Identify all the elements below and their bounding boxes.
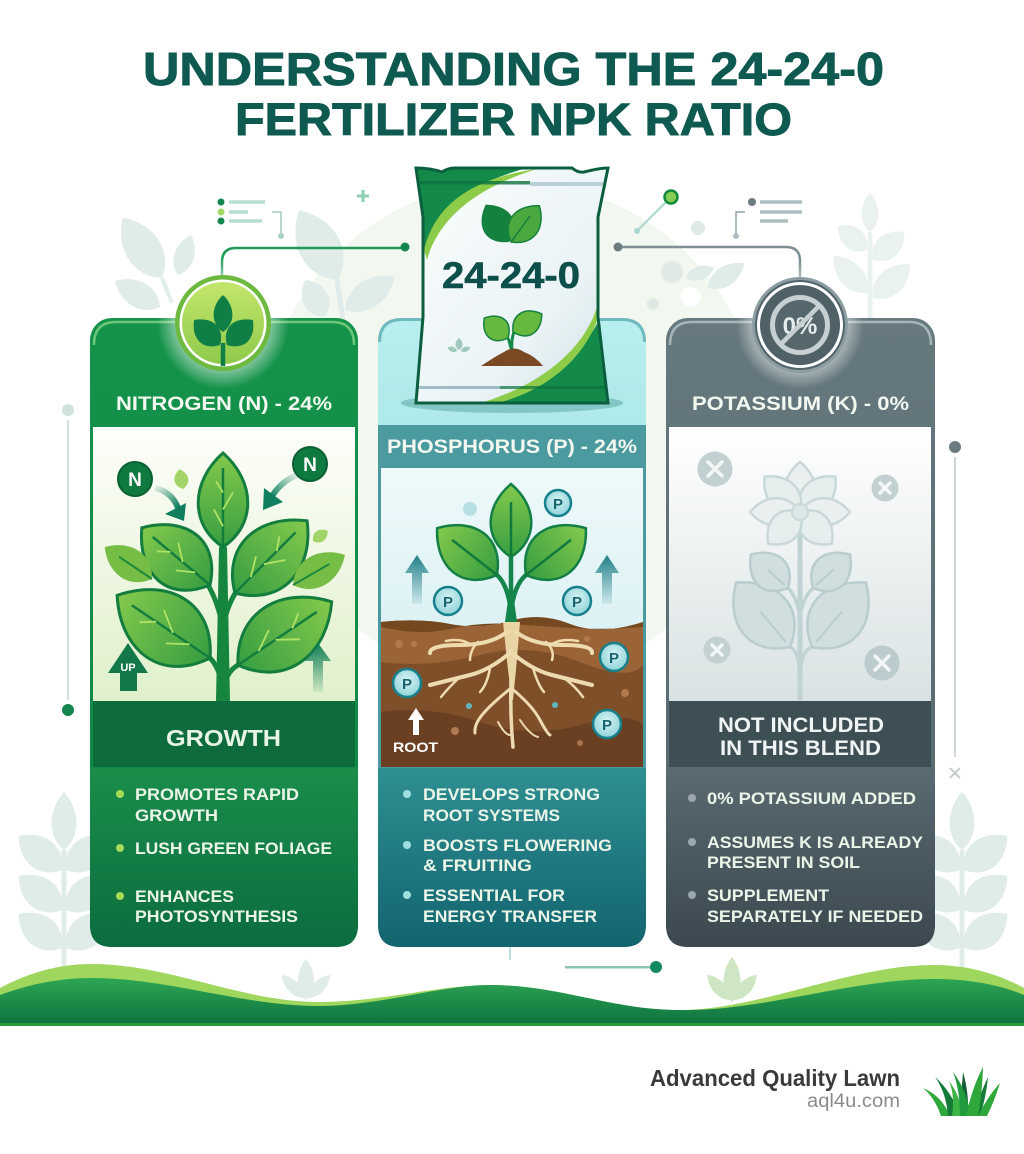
potassium notes: SEPARATELY IF NEEDED (707, 907, 923, 926)
left decoration lines (62, 190, 369, 716)
panel: nitrogen (90, 318, 358, 947)
icon: potassium badge: 0% (783, 313, 817, 340)
roots (430, 622, 592, 747)
panel: potassium (666, 318, 935, 947)
phosphorus illustration: P (572, 594, 582, 611)
faint hill plants (277, 957, 762, 1004)
growth up arrows: UP (120, 662, 136, 674)
rolling hills (0, 957, 1024, 1026)
potassium notes: SUPPLEMENT (707, 886, 830, 905)
nitrogen badges and arrows: N (303, 455, 317, 476)
phosphorus benefits (403, 785, 612, 926)
potassium notes: PRESENT IN SOIL (707, 853, 860, 872)
title: UNDERSTANDING THE 24-24-0 (143, 43, 884, 95)
potassium illustration (669, 427, 931, 701)
nitrogen illustration (93, 427, 355, 701)
x marks (698, 452, 900, 680)
nitrogen benefits: ENHANCES (135, 887, 234, 906)
nitrogen benefits: PHOTOSYNTHESIS (135, 907, 298, 926)
nitrogen heading: NITROGEN (N) - 24% (116, 394, 332, 415)
growth up arrows (108, 643, 331, 692)
potassium heading: POTASSIUM (K) - 0% (692, 394, 909, 415)
root label: ROOT (393, 739, 438, 755)
phosphorus illustration: P (602, 717, 612, 734)
title: FERTILIZER NPK RATIO (235, 94, 792, 145)
bag top leaves (472, 196, 551, 251)
phosphorus benefits: DEVELOPS STRONG (423, 785, 600, 804)
phosphorus benefits: ROOT SYSTEMS (423, 806, 560, 825)
bag ratio text: 24-24-0 (442, 255, 580, 296)
faint background plants (9, 193, 1017, 968)
growth arrows (405, 555, 619, 604)
title (143, 43, 884, 145)
not included band: IN THIS BLEND (720, 737, 881, 760)
nitrogen benefits: GROWTH (135, 806, 218, 825)
phosphorus benefits: & FRUITING (423, 856, 532, 875)
phosphorus benefits: ESSENTIAL FOR (423, 886, 565, 905)
phosphorus badges (393, 490, 628, 738)
potassium notes: ASSUMES K IS ALREADY (707, 833, 924, 852)
bag body (418, 170, 606, 402)
nitrogen benefits: PROMOTES RAPID (135, 785, 299, 804)
nitrogen badges and arrows (118, 447, 327, 521)
bag shadow (401, 393, 623, 413)
phosphorus illustration: P (402, 676, 412, 693)
right decoration lines (510, 190, 961, 973)
connector: nitrogen (222, 248, 405, 280)
root label (393, 708, 438, 755)
nitrogen benefits: LUSH GREEN FOLIAGE (135, 839, 332, 858)
phosphorus heading: PHOSPHORUS (P) - 24% (387, 437, 637, 458)
growth band (93, 701, 355, 767)
brand footer: Advanced Quality Lawn (650, 1065, 900, 1091)
phosphorus illustration (381, 468, 643, 767)
nitrogen badges and arrows: N (128, 470, 142, 491)
phosphorus benefits: ENERGY TRANSFER (423, 907, 597, 926)
growth band: GROWTH (166, 725, 281, 751)
potassium notes: 0% POTASSIUM ADDED (707, 789, 916, 808)
icon: nitrogen badge (157, 257, 289, 389)
faded flower (715, 462, 887, 700)
not included band (669, 701, 931, 767)
phosphorus illustration: P (443, 594, 453, 611)
connector dots (400, 242, 622, 252)
bag seedling (447, 304, 548, 366)
icon: grass (923, 1067, 1000, 1116)
brand footer: aql4u.com (807, 1091, 900, 1112)
connector: potassium (618, 247, 800, 280)
plant stem (208, 585, 238, 690)
fertilizer bag (401, 165, 623, 413)
potassium notes (688, 789, 924, 926)
plant leaves (96, 453, 353, 692)
brand footer (650, 1065, 1000, 1116)
panel: phosphorus (378, 318, 646, 947)
seedling (422, 484, 601, 622)
icon: potassium badge (736, 261, 864, 389)
nitrogen benefits (116, 785, 332, 926)
soil layers (381, 617, 643, 767)
phosphorus benefits: BOOSTS FLOWERING (423, 836, 612, 855)
phosphorus illustration: P (609, 650, 619, 667)
not included band: NOT INCLUDED (718, 714, 884, 737)
phosphorus illustration: P (553, 496, 563, 513)
